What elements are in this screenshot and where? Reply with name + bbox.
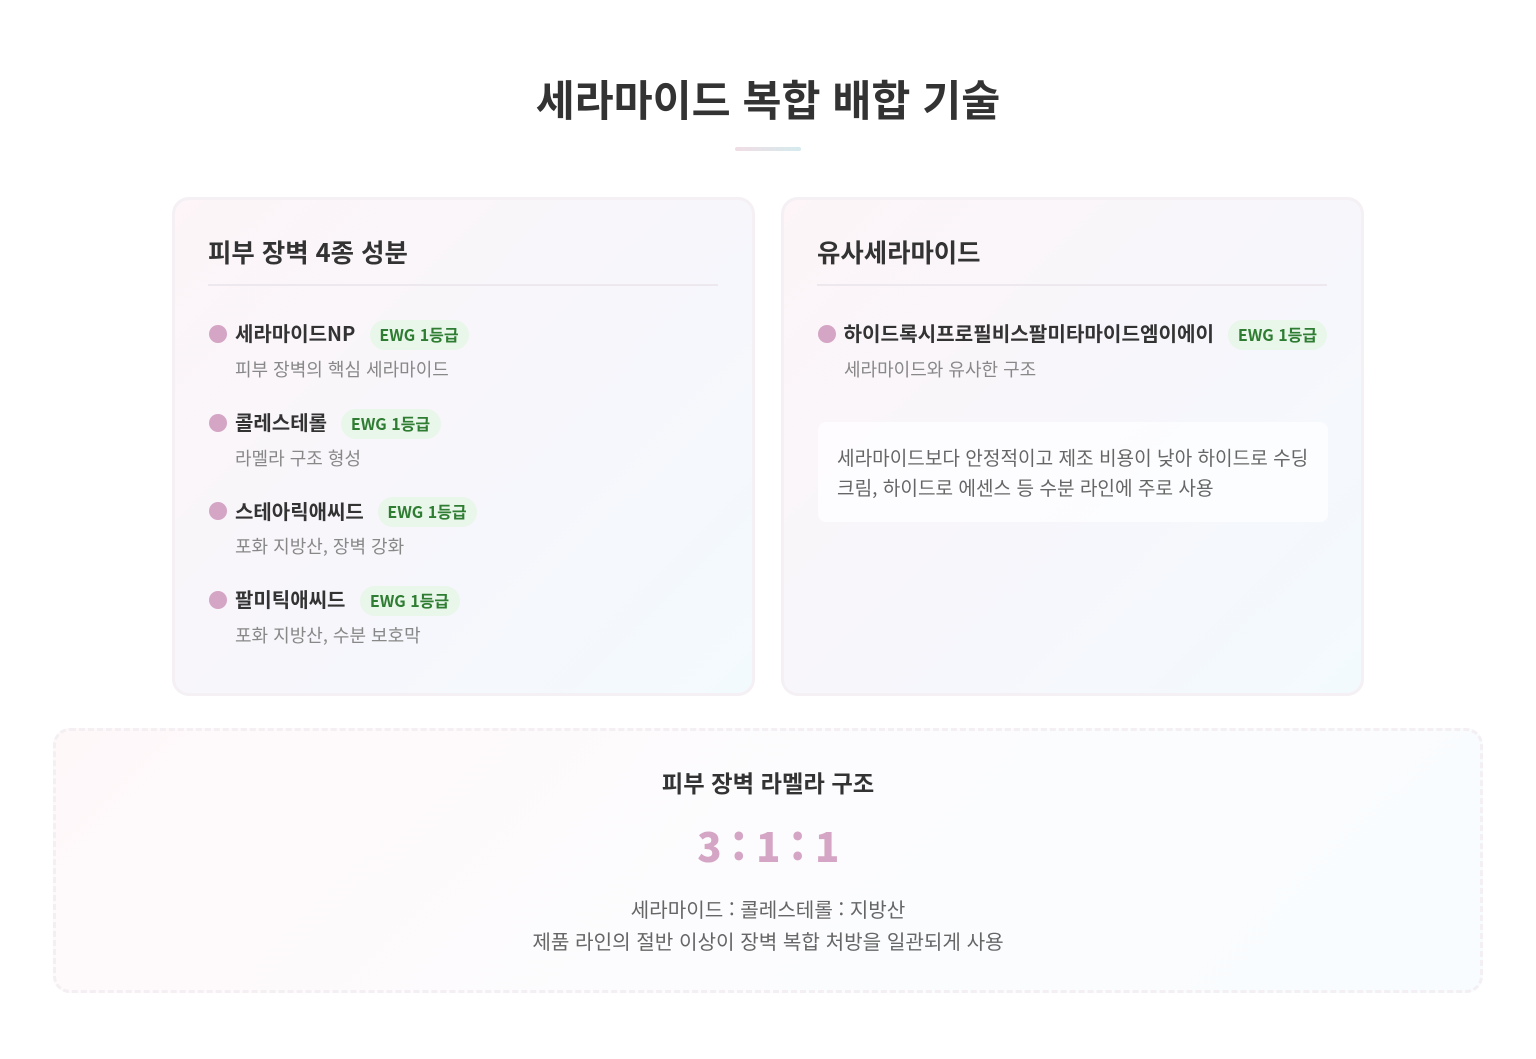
EWG badge: EWG 1등급 [351, 411, 430, 435]
panel: pseudo-ceramide [781, 197, 1364, 696]
ingredient description: 포화 지방산, 장벽 강화 [235, 533, 404, 559]
ingredient: palmitic acid [209, 584, 460, 648]
EWG badge: EWG 1등급 [370, 588, 449, 612]
EWG badge [360, 586, 460, 616]
ingredient description: 포화 지방산, 수분 보호막 [235, 622, 421, 648]
icon: bullet [818, 325, 836, 343]
note text: 크림, 하이드로 에센스 등 수분 라인에 주로 사용 [837, 473, 1214, 501]
ingredient name: 세라마이드NP [235, 318, 355, 347]
ratio description [532, 894, 1004, 955]
EWG badge [340, 409, 440, 439]
EWG badge [1228, 320, 1327, 350]
panel heading: 피부 장벽 4종 성분 [208, 234, 408, 270]
EWG badge: EWG 1등급 [379, 322, 459, 346]
note box [818, 422, 1328, 522]
note text: 세라마이드보다 안정적이고 제조 비용이 낮아 하이드로 수딩 [837, 443, 1308, 471]
panel: skin barrier ingredients [172, 197, 755, 696]
icon: bullet [209, 325, 227, 343]
ingredient: ceramide NP [209, 318, 469, 382]
panel: lamellar structure [53, 728, 1483, 993]
panel heading: 피부 장벽 라멜라 구조 [662, 765, 874, 799]
note text [837, 443, 1308, 501]
ingredient name: 스테아릭애씨드 [235, 496, 364, 525]
ingredient: stearic acid [209, 496, 477, 559]
icon: bullet [209, 591, 227, 609]
ingredient: hydroxypropyl bispalmitamide MEA [818, 318, 1327, 382]
EWG badge: EWG 1등급 [387, 499, 467, 523]
icon: bullet [209, 414, 227, 432]
ingredient name: 하이드록시프로필비스팔미타마이드엠이에이 [844, 318, 1214, 347]
ingredient: cholesterol [209, 407, 441, 471]
title: 세라마이드 복합 배합 기술 [536, 68, 1000, 129]
EWG badge [370, 320, 468, 350]
ingredient name: 팔미틱애씨드 [235, 584, 345, 613]
icon: bullet [209, 502, 227, 520]
panel heading: 유사세라마이드 [817, 234, 981, 270]
ratio description: 제품 라인의 절반 이상이 장벽 복합 처방을 일관되게 사용 [532, 926, 1004, 955]
ratio: 3 : 1 : 1 [697, 816, 839, 874]
ingredient description: 세라마이드와 유사한 구조 [844, 356, 1036, 382]
ingredient name: 콜레스테롤 [235, 407, 327, 436]
EWG badge [378, 497, 476, 527]
ingredient description: 피부 장벽의 핵심 세라마이드 [235, 356, 449, 382]
ingredient description: 라멜라 구조 형성 [235, 445, 361, 471]
EWG badge: EWG 1등급 [1238, 322, 1317, 346]
ratio description: 세라마이드 : 콜레스테롤 : 지방산 [631, 894, 905, 923]
title underline [735, 147, 801, 151]
